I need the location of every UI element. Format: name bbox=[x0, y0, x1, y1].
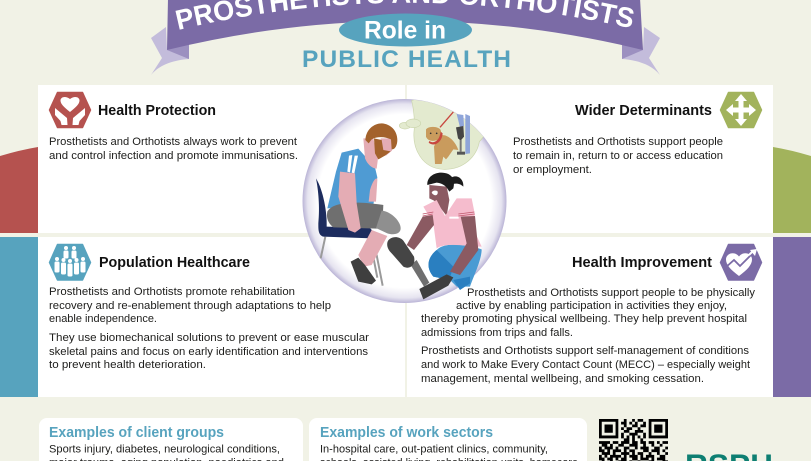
thought bubble with dog and prosthesis bbox=[399, 100, 484, 170]
body text: recovery and re-enablement through adaptations to help bbox=[49, 300, 331, 312]
panel: health protection bbox=[38, 85, 405, 233]
purple side band bbox=[773, 237, 811, 397]
red side band bbox=[0, 147, 38, 233]
body text: or employment. bbox=[513, 164, 592, 176]
body text: Prosthetists and Orthotists promote rehabilitation bbox=[49, 286, 295, 298]
heading: Examples of client groups bbox=[49, 425, 224, 441]
body text: Prosthetists and Orthotists always work to prevent bbox=[49, 136, 297, 148]
icon: group of people bbox=[50, 244, 90, 280]
body text: They use biomechanical solutions to prevent or ease muscular bbox=[49, 332, 369, 344]
green side band bbox=[773, 147, 811, 233]
subtitle oval: Role in bbox=[364, 16, 446, 44]
body text bbox=[49, 286, 369, 371]
body text bbox=[49, 444, 284, 461]
title ribbon bbox=[151, 0, 660, 74]
body text: Prosthetists and Orthotists support self-management of conditions bbox=[421, 345, 750, 357]
man with prosthetic limb removed bbox=[327, 123, 401, 284]
body text: and control infection and promote immunisations. bbox=[49, 150, 298, 162]
body text: Prosthetists and Orthotists support people bbox=[513, 136, 723, 148]
ribbon left tail bbox=[151, 27, 189, 75]
panel: health improvement bbox=[407, 237, 773, 397]
heading: Health Improvement bbox=[572, 255, 712, 271]
subtitle oval bbox=[339, 14, 472, 46]
body text bbox=[320, 444, 578, 461]
body text: admissions from trips and falls. bbox=[421, 327, 573, 339]
heading: Examples of work sectors bbox=[320, 425, 493, 441]
body text: Prosthetists and Orthotists support people to be physically bbox=[467, 287, 756, 299]
card: examples of work sectors bbox=[309, 418, 587, 461]
heading: Health Protection bbox=[98, 103, 216, 119]
card: examples of client groups bbox=[39, 418, 303, 461]
blue side band bbox=[0, 237, 38, 397]
body text bbox=[49, 136, 298, 162]
icon: heart with rising arrow bbox=[720, 244, 762, 280]
ribbon right tail bbox=[622, 27, 660, 75]
body text bbox=[513, 136, 723, 176]
body text: skeletal pains and focus on early identification and interventions bbox=[49, 346, 369, 358]
ribbon folds bbox=[167, 43, 643, 59]
ribbon band bbox=[167, 0, 643, 50]
body text: and work to Make Every Contact Count (MECC) – especially weight bbox=[421, 359, 750, 371]
body text: management, mental wellbeing, and smoking cessation. bbox=[421, 373, 704, 385]
woman fitting prosthesis bbox=[387, 173, 482, 299]
panel: population healthcare bbox=[38, 237, 405, 397]
body text: Sports injury, diabetes, neurological conditions, bbox=[49, 444, 280, 456]
body text: thereby promoting physical wellbeing. They help prevent hospital bbox=[421, 313, 747, 325]
body text: enable independence. bbox=[49, 313, 157, 325]
body text: active by enabling participation in activities they enjoy, bbox=[456, 300, 727, 312]
central illustration bbox=[302, 90, 506, 303]
chair bbox=[316, 178, 383, 286]
heading: Wider Determinants bbox=[575, 103, 712, 119]
body text: In-hospital care, out-patient clinics, community, bbox=[320, 444, 548, 456]
heading: Population Healthcare bbox=[99, 255, 250, 271]
icon: four arrows bbox=[720, 92, 762, 128]
body text bbox=[421, 287, 756, 385]
panel: wider determinants bbox=[407, 85, 773, 233]
QR code bbox=[599, 419, 668, 461]
body text: to remain in, return to or access education bbox=[513, 150, 723, 162]
icon: hands holding heart bbox=[50, 92, 90, 128]
body text: to prevent health deterioration. bbox=[49, 359, 206, 371]
subtitle public health: PUBLIC HEALTH bbox=[302, 46, 511, 73]
